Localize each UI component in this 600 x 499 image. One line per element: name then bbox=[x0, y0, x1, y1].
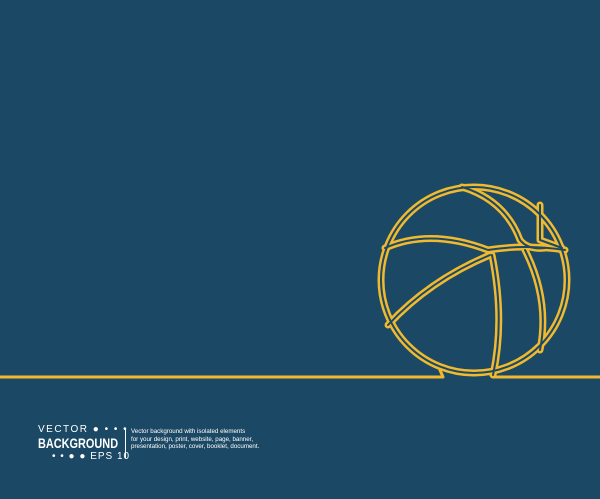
description text: Vector background with isolated elements bbox=[131, 428, 245, 435]
ball bbox=[381, 187, 567, 375]
logo block: BACKGROUND bbox=[38, 435, 118, 451]
description text: presentation, poster, cover, booklet, document. bbox=[131, 443, 259, 450]
logo block bbox=[38, 424, 130, 462]
description text bbox=[125, 428, 271, 458]
logo block: VECTOR ● • • • bbox=[38, 424, 128, 435]
logo block: • • ● ● EPS 10 bbox=[52, 451, 130, 462]
description text: for your design, print, website, page, banner, bbox=[131, 436, 253, 443]
ground line bbox=[0, 370, 600, 377]
